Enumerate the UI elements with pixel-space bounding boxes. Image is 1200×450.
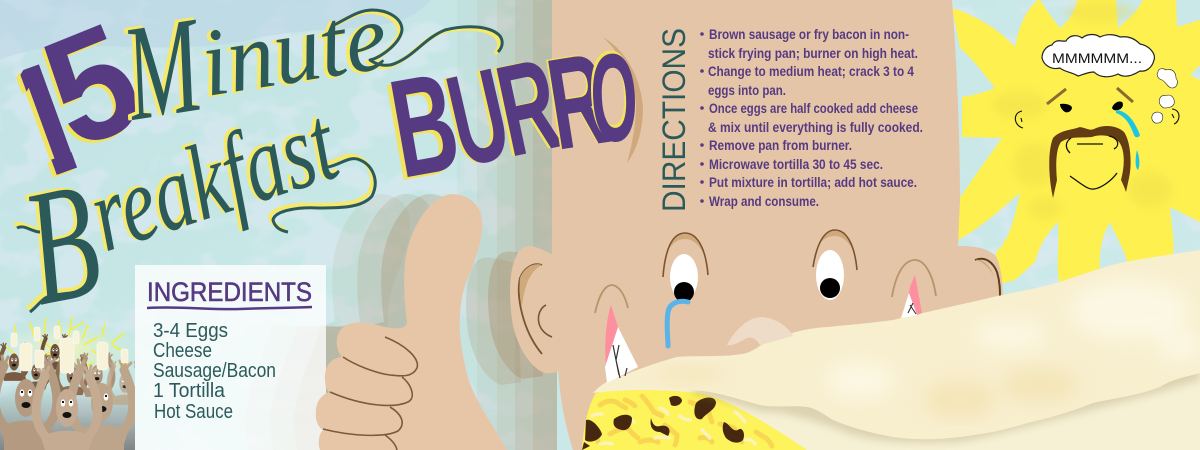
left ear bbox=[510, 246, 562, 373]
sun bbox=[952, 0, 1200, 285]
directions list: Change to medium heat; crack 3 to 4 bbox=[708, 64, 914, 79]
sausage chunks bbox=[582, 396, 744, 450]
directions list: Remove pan from burner. bbox=[709, 138, 852, 153]
egg filling bbox=[582, 390, 807, 450]
brow crescent behind O bbox=[603, 37, 643, 163]
back row people bbox=[0, 343, 28, 381]
directions list: Brown sausage or fry bacon in non- bbox=[709, 27, 909, 42]
title: BURRO: O bbox=[587, 26, 641, 169]
title: Breakfast: B bbox=[9, 147, 115, 340]
ingredients underline bbox=[147, 307, 312, 309]
sun moustache bbox=[1049, 126, 1131, 198]
right mouth corner with teeth bbox=[892, 260, 936, 318]
right eye bbox=[813, 230, 857, 300]
title: BURRO: B bbox=[376, 46, 465, 211]
nose bbox=[727, 317, 793, 345]
directions heading: DIRECTIONS bbox=[656, 28, 692, 212]
title: BURRO: U bbox=[433, 40, 518, 194]
directions list bbox=[700, 27, 923, 209]
left eye bbox=[663, 233, 708, 302]
directions list: Put mixture in tortilla; add hot sauce. bbox=[709, 175, 917, 190]
thought puffs bbox=[1152, 69, 1177, 123]
flap shadow bbox=[692, 373, 1200, 446]
directions list: Once eggs are half cooked add cheese bbox=[709, 101, 918, 116]
title: Minute bbox=[110, 0, 502, 150]
sun body bbox=[952, 0, 1200, 285]
head bbox=[552, 0, 1003, 450]
front row people bbox=[0, 356, 57, 450]
title: Breakfast bbox=[6, 81, 375, 340]
right ear line bbox=[975, 259, 1000, 298]
directions list: Wrap and consume. bbox=[709, 194, 819, 209]
tear bbox=[667, 301, 688, 346]
glow rays bbox=[4, 316, 132, 370]
ingredients heading: INGREDIENTS bbox=[147, 277, 312, 307]
hand thumbs up bbox=[316, 194, 507, 450]
title: BURRO bbox=[376, 23, 641, 211]
title: Breakfast: reakfast bbox=[75, 82, 352, 275]
left mouth corner with teeth bbox=[595, 285, 638, 383]
directions list: eggs into pan. bbox=[708, 83, 786, 98]
title: BURRO: U bbox=[436, 40, 521, 194]
title: Breakfast: B bbox=[6, 146, 112, 339]
sun mottling bbox=[992, 2, 1172, 220]
sun eyebrows bbox=[1047, 88, 1133, 104]
sun tears bbox=[1116, 110, 1140, 170]
ingredients list: 1 Tortilla bbox=[153, 380, 226, 402]
lower tortilla bbox=[582, 373, 1200, 450]
title: 15 bbox=[16, 24, 136, 178]
speech bubble bbox=[1042, 34, 1154, 77]
head echo shadow bands bbox=[457, 0, 557, 450]
sun eyes bbox=[1060, 101, 1123, 112]
sun nose and mouth bbox=[1066, 136, 1118, 189]
title: BURRO: R bbox=[539, 25, 617, 178]
title: BURRO: R bbox=[486, 30, 571, 184]
title: BURRO: O bbox=[585, 23, 639, 166]
burrito bbox=[582, 250, 1200, 450]
title: BURRO: B bbox=[380, 43, 469, 208]
bullets bbox=[700, 32, 704, 203]
hand echo shadows bbox=[244, 194, 484, 450]
directions list: & mix until everything is fully cooked. bbox=[708, 120, 923, 135]
ingredients list: Hot Sauce bbox=[154, 401, 233, 423]
title: BURRO: R bbox=[483, 30, 568, 184]
ingredients list bbox=[153, 320, 276, 423]
ingredients list: Cheese bbox=[153, 340, 212, 362]
sun ears bbox=[1015, 109, 1179, 128]
directions list: Microwave tortilla 30 to 45 sec. bbox=[709, 157, 883, 172]
tortilla light patches bbox=[826, 280, 1200, 398]
ingredients list: Sausage/Bacon bbox=[153, 360, 276, 382]
ingredients panel bbox=[135, 265, 326, 450]
tortilla flap bbox=[593, 250, 1200, 439]
title: Breakfast: reakfast bbox=[72, 81, 349, 274]
directions list: stick frying pan; burner on high heat. bbox=[708, 46, 918, 61]
ingredients list: 3-4 Eggs bbox=[153, 320, 228, 342]
title: BURRO: R bbox=[537, 24, 615, 177]
speech bubble: MMMMMM... bbox=[1052, 50, 1142, 66]
ear echo shadows bbox=[466, 252, 543, 385]
floating burritos bbox=[11, 326, 128, 373]
tortilla warm patches bbox=[654, 366, 1080, 420]
crowd worshipping burritos bbox=[0, 316, 141, 450]
